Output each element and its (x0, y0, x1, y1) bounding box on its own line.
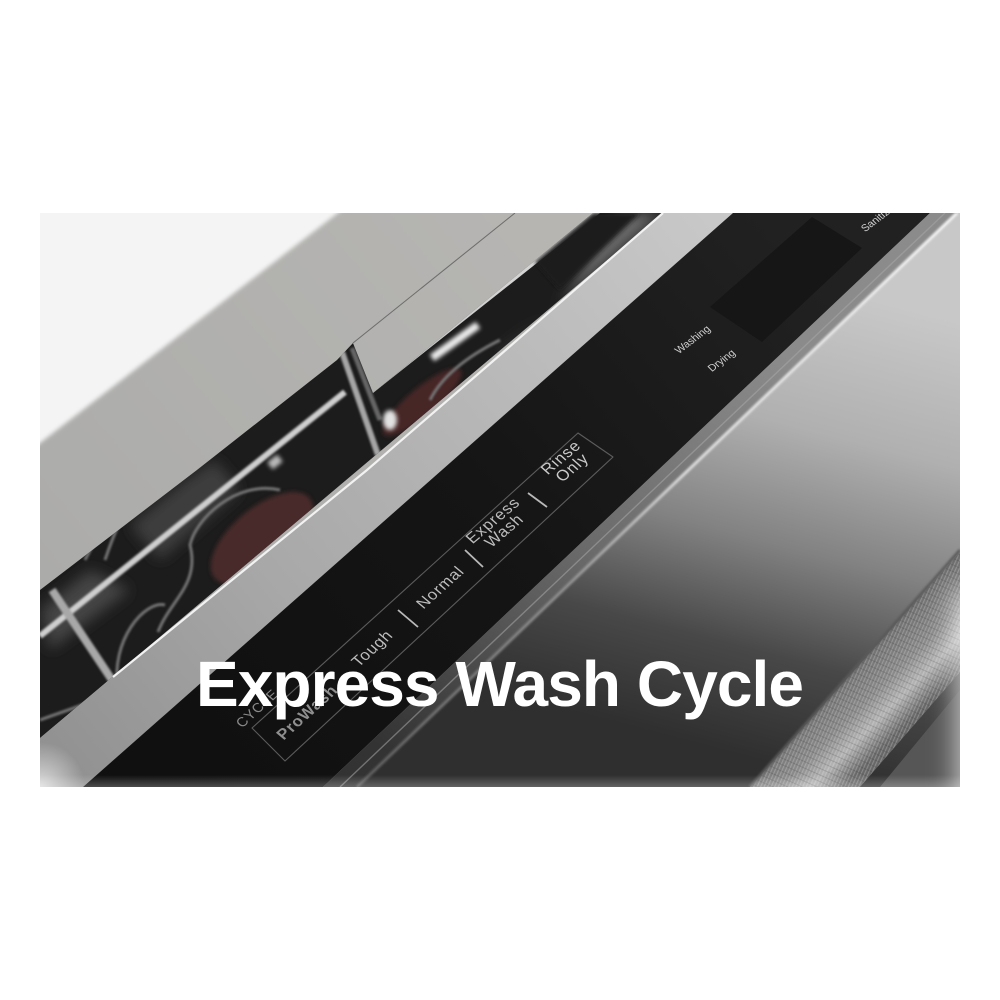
line: chrome highlights (340, 213, 957, 787)
label: Express Wash: Wash (481, 511, 528, 551)
panel: gray door trim band (40, 213, 930, 787)
label: Express Wash: Express (462, 494, 524, 547)
area: light back wall (353, 213, 600, 393)
photo: dishwasher top controls (40, 213, 960, 787)
label: ProWash: ProWash (273, 682, 342, 743)
vignette fades (40, 577, 960, 787)
area: blurred gray patches (40, 213, 663, 650)
area: lighter door corner under handle (880, 690, 960, 787)
label: Sanitize: Sanitize (859, 203, 897, 234)
icon: wire rack strands (40, 340, 500, 720)
panel: rack interior opening (40, 213, 680, 743)
label: Normal: Normal (413, 563, 468, 612)
panel: stainless door (357, 213, 960, 787)
title: Express Wash Cycle (196, 648, 804, 720)
display: dark window (710, 217, 862, 342)
cycle labels (232, 437, 596, 743)
background: white countertop (40, 213, 335, 441)
strip: metal edge below panel (323, 213, 957, 787)
icon: rack post (52, 590, 112, 680)
panel: black control panel (83, 213, 930, 787)
label: Rinse Only: Rinse (537, 437, 585, 478)
cycle separators (398, 493, 547, 627)
icon: bright rack rod (40, 392, 345, 636)
label: CYCLE: CYCLE (232, 686, 282, 730)
line: back wall divider (353, 213, 515, 343)
infographic: dishwasher control panel photo with title (40, 213, 960, 787)
label: Tough: Tough (348, 627, 397, 670)
area: dark brush (535, 213, 640, 290)
panel: light trim under opening (40, 213, 733, 787)
line: white opening edge (113, 213, 663, 677)
icon: rear rack post (342, 348, 380, 455)
icon: red plate (209, 366, 462, 584)
label: Drying: Drying (705, 347, 738, 374)
handle: textured door handle (750, 550, 960, 787)
cycle selector outline (252, 433, 613, 761)
icon: glints on rear rack (270, 325, 478, 466)
status labels (674, 213, 890, 372)
label: Rinse Only: Only (552, 450, 593, 485)
label: Washing: Washing (672, 323, 713, 356)
